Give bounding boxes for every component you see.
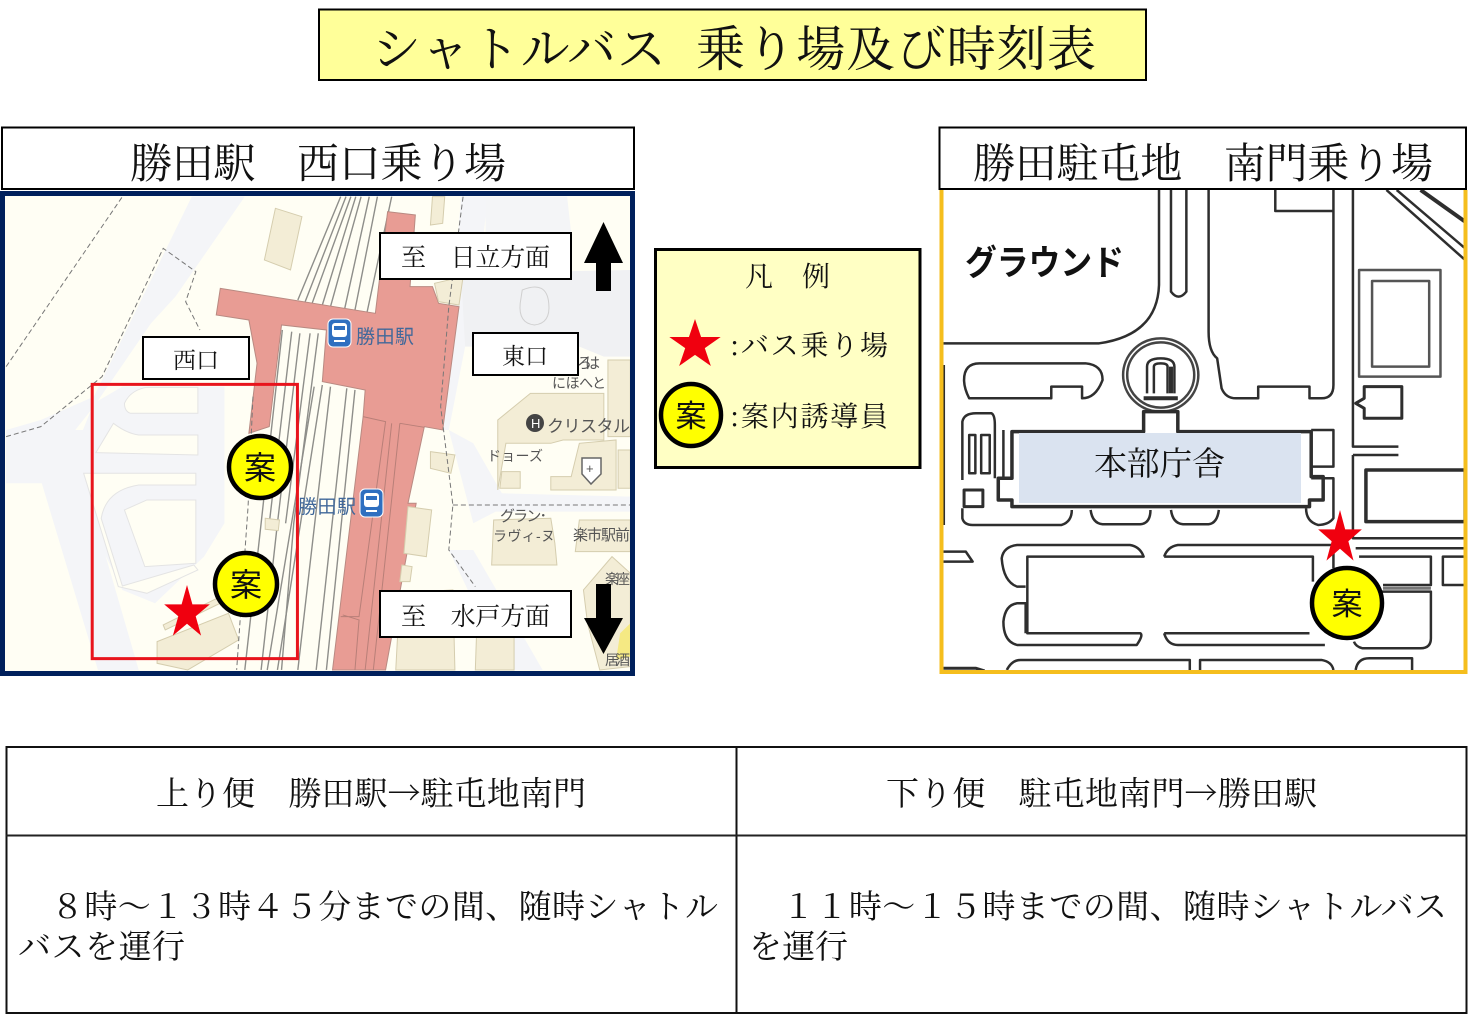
title: シャトルバス [372, 11, 666, 81]
station building [216, 212, 459, 670]
header: outbound: 下り便 駐屯地南門→勝田駅 [886, 768, 1317, 815]
title [319, 10, 1146, 81]
roads [6, 197, 630, 670]
map frame [2, 194, 632, 674]
buildings [157, 197, 630, 670]
icon: hotel marker [526, 414, 544, 432]
map place names: にほへと [552, 375, 606, 391]
icon: shield marker [582, 458, 601, 484]
icon: guide marker camp: 案 [1332, 587, 1362, 622]
label: to Mito [380, 591, 571, 637]
body: inbound schedule: ８時～１３時４５分までの間、随時シャトル [51, 881, 718, 928]
admin dashed lines [6, 197, 630, 670]
plaza islands [84, 387, 198, 593]
map place names: グラン･ [500, 508, 547, 525]
icon: station marker lower [360, 489, 383, 517]
legend title: 凡 例 [745, 255, 830, 295]
legend text: guide: :案内誘導員 [730, 395, 888, 435]
timetable [6, 747, 1467, 1013]
map place names: ラヴィ-ヌ [493, 528, 555, 544]
panel: camp map [941, 190, 1469, 674]
label: east exit [473, 333, 578, 375]
icon: station marker upper [328, 319, 351, 347]
header: inbound: 上り便 勝田駅→駐屯地南門 [156, 768, 586, 815]
building block: headquarters [1019, 433, 1301, 503]
map place names: 勝田駅 [356, 326, 414, 348]
label: to Hitachi: 至 日立方面 [401, 238, 550, 274]
panel: west exit map [0, 191, 635, 676]
legend star [669, 319, 721, 366]
building block: headquarters: 本部庁舎 [1094, 438, 1225, 485]
map frame [942, 190, 1466, 672]
map place names [298, 326, 630, 668]
legend text: bus stop: :バス乗り場 [730, 324, 888, 364]
title: 乗り場及び時刻表 [696, 11, 1096, 81]
panel: legend [656, 250, 920, 468]
heading: Katsuta station west exit: 勝田駅 西口乗り場 [130, 131, 506, 191]
label: west exit [143, 337, 249, 379]
heading: Katsuta station west exit [2, 128, 634, 191]
heading: Katsuta camp south gate: 勝田駐屯地 南門乗り場 [973, 131, 1433, 191]
icon: guide marker lower [215, 553, 277, 615]
red area frame [92, 384, 297, 659]
icon: guide marker camp [1312, 568, 1382, 638]
body: outbound schedule [749, 881, 1447, 968]
map place names: ろは [577, 355, 600, 372]
label: east exit: 東口 [502, 338, 548, 371]
icon: guide marker upper: 案 [244, 450, 276, 486]
map place names: 居酒 [605, 652, 630, 668]
icon: guide marker lower: 案 [230, 567, 262, 603]
map place names: 楽座 [605, 571, 630, 587]
icon: hotel marker: H [531, 416, 540, 431]
arrow: up [584, 222, 623, 291]
icon: bus stop star camp [1318, 510, 1362, 561]
map place names: クリスタル [547, 417, 630, 436]
icon: guide marker upper [229, 436, 291, 498]
legend guide icon: 案 [676, 399, 706, 434]
label: to Mito: 至 水戸方面 [401, 597, 550, 633]
tracks [245, 197, 392, 670]
map place names: ドョーズ [487, 448, 543, 464]
map place names: 勝田駅 [298, 496, 356, 518]
legend guide icon [661, 384, 721, 446]
body: outbound schedule: １１時～１５時までの間、随時シャトルバス [782, 881, 1447, 928]
ground label: グラウンド [965, 244, 1124, 283]
icon: shield marker: + [586, 461, 594, 476]
body: inbound schedule: バスを運行 [18, 921, 185, 968]
label: west exit: 西口 [173, 342, 219, 375]
body: inbound schedule [18, 881, 718, 968]
arrow: down [584, 584, 623, 654]
map place names: 楽市駅前 [573, 527, 630, 544]
label: to Hitachi [380, 233, 571, 279]
body: outbound schedule: を運行 [749, 921, 848, 968]
icon: bus stop star west [164, 585, 210, 636]
